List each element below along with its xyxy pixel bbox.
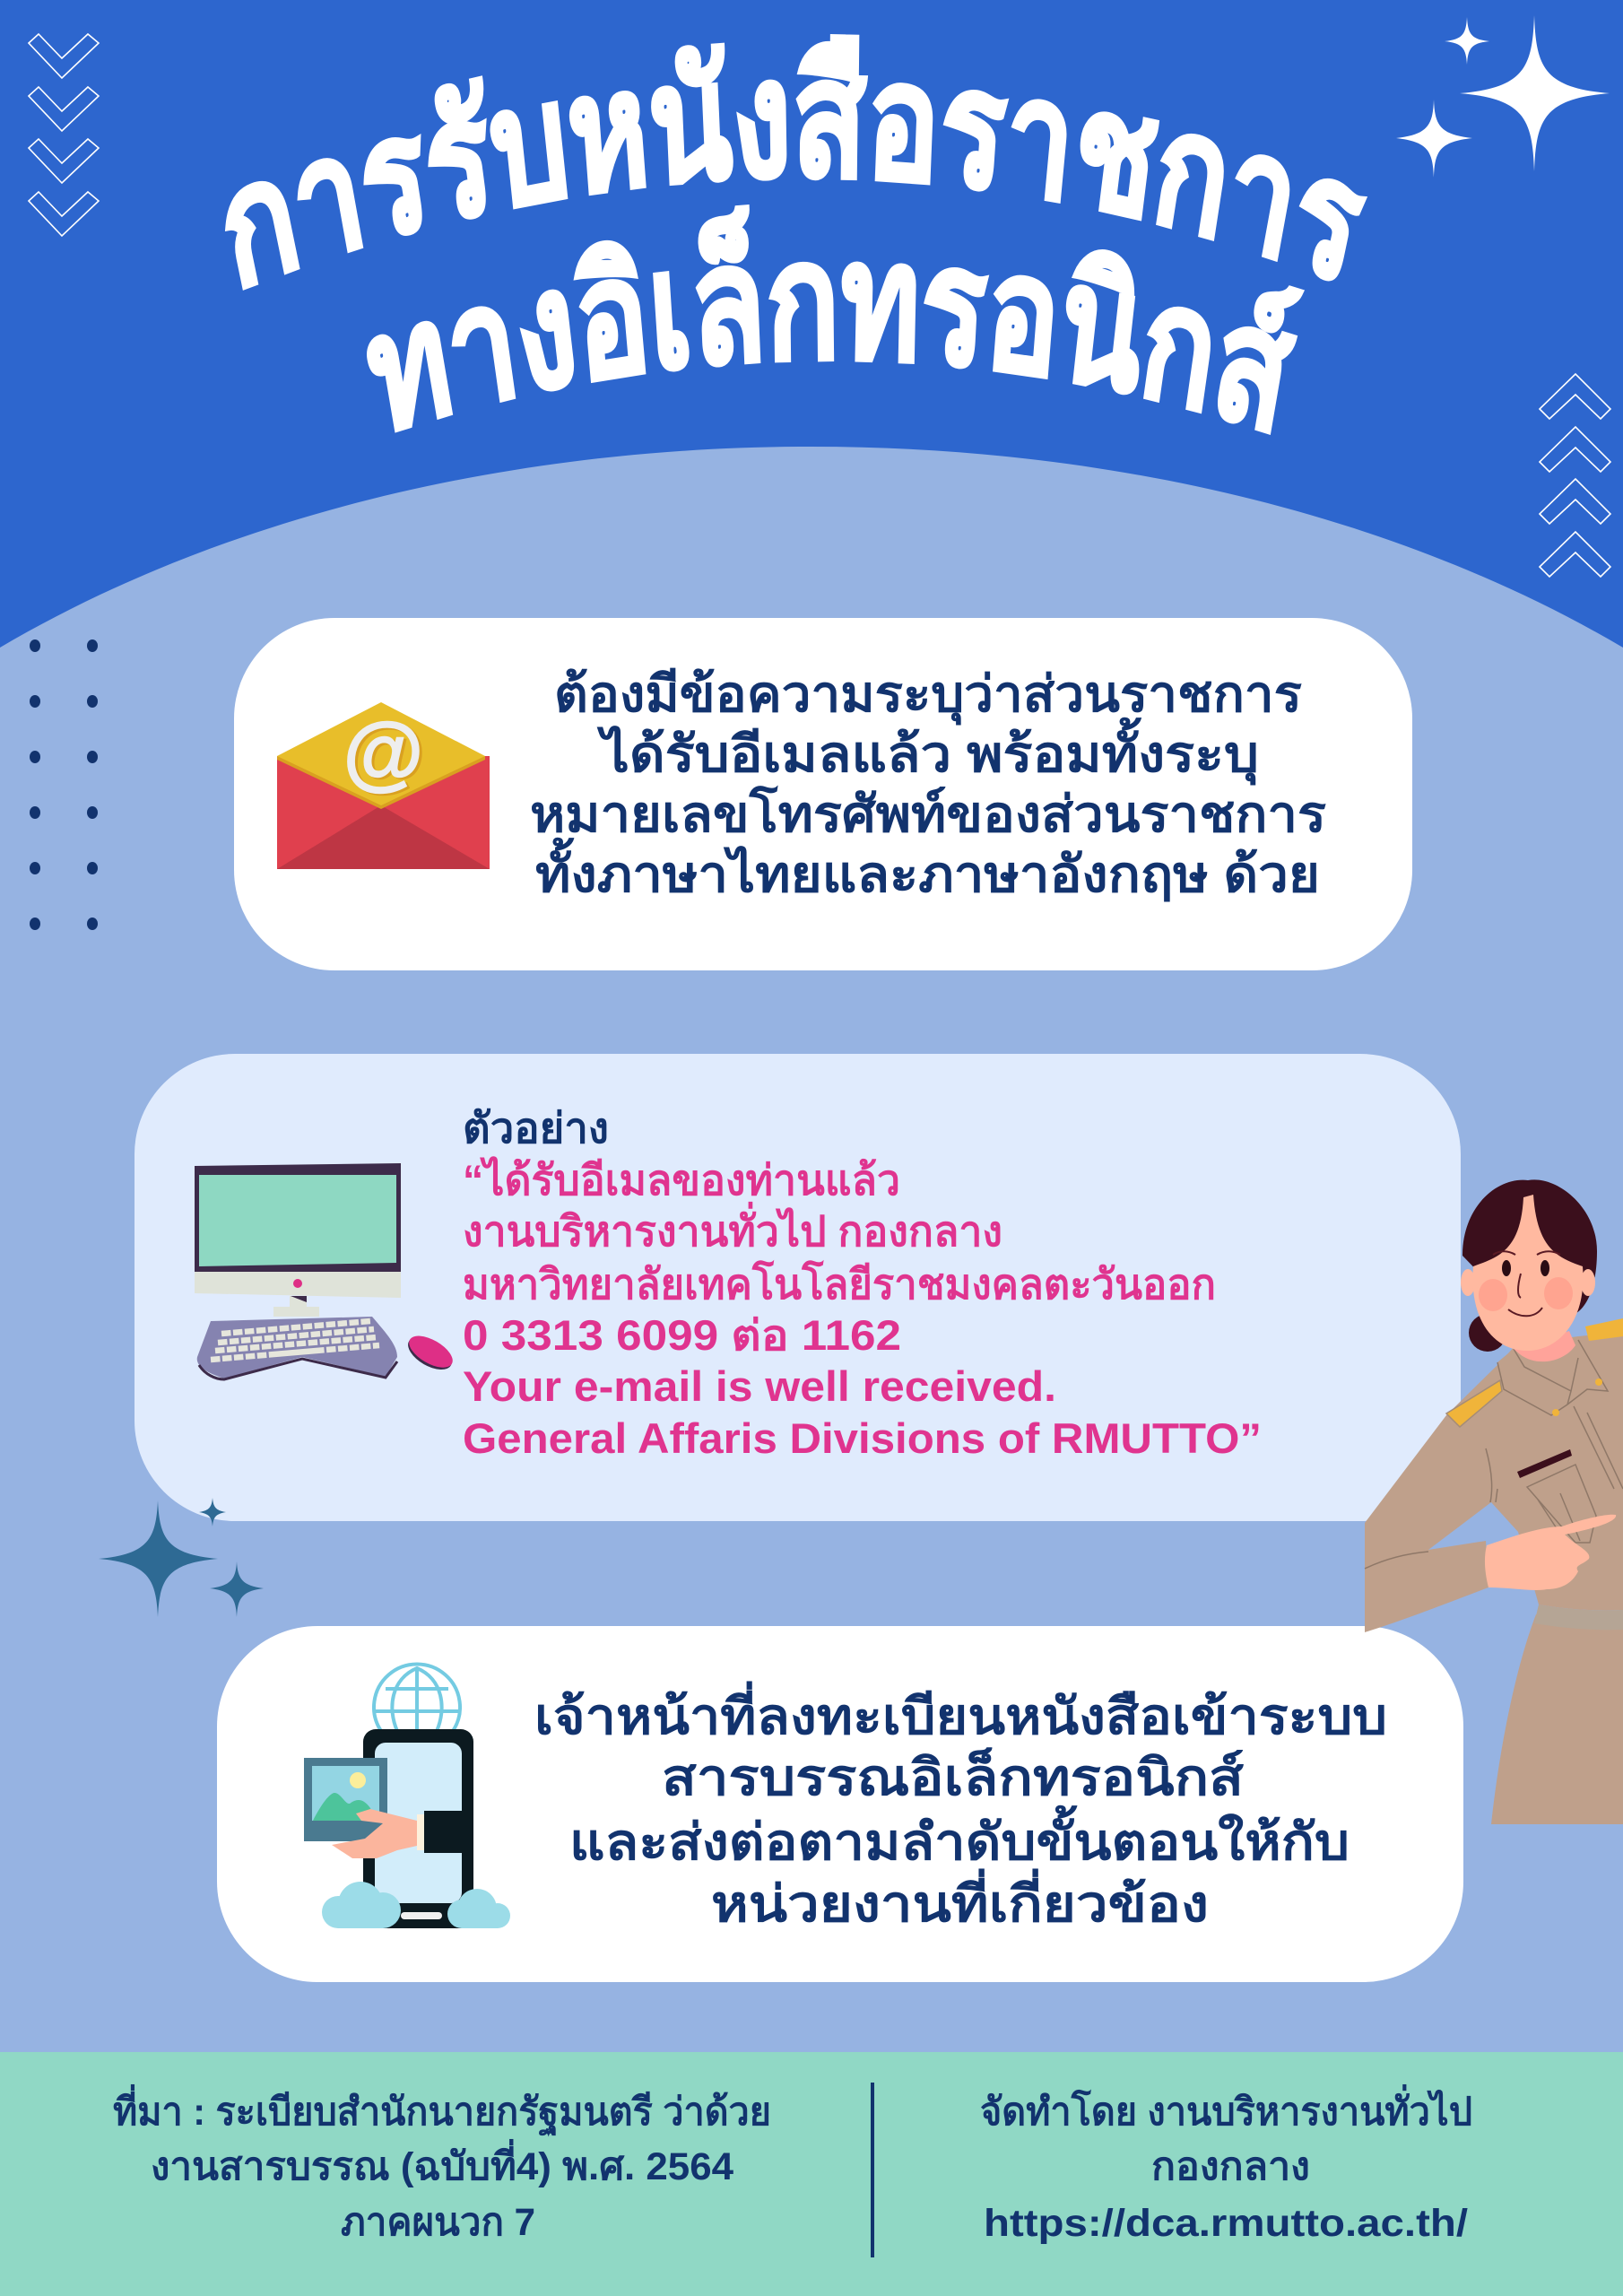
panel: example message xyxy=(135,1054,1461,1521)
hair xyxy=(1462,1179,1597,1313)
panel: email notice xyxy=(234,618,1412,970)
face xyxy=(1472,1195,1584,1351)
collar xyxy=(1497,1340,1608,1415)
hand pointing xyxy=(1485,1515,1616,1590)
belt xyxy=(1534,1605,1623,1630)
text: credits: จัดทำโดย งานบริหารงานทั่วไป xyxy=(980,2084,1472,2134)
icon: phone with globe, picture and clouds xyxy=(304,1664,510,1928)
text: source: ที่มา : ระเบียบสำนักนายกรัฐมนตรี ว่าด้วย xyxy=(113,2084,771,2136)
text: registration step: เจ้าหน้าที่ลงทะเบียนหนังสือเข้าระบบ xyxy=(534,1681,1387,1744)
ears xyxy=(1461,1269,1475,1296)
epaulette right xyxy=(1585,1318,1623,1341)
icon: envelope: @ xyxy=(344,709,425,801)
arm crease lines xyxy=(1365,1448,1497,1569)
text: example message: ตัวอย่าง xyxy=(463,1104,609,1152)
text: email notice: หมายเลขโทรศัพท์ของส่วนราชการ xyxy=(530,785,1326,842)
cheeks xyxy=(1479,1279,1507,1311)
header: blue background with arch xyxy=(0,0,1623,648)
skirt xyxy=(1491,1614,1623,1824)
text: registration step: สารบรรณอิเล็กทรอนิกส์ xyxy=(662,1746,1245,1805)
icon: envelope xyxy=(277,702,490,869)
neck xyxy=(1514,1331,1575,1361)
text: example message: มหาวิทยาลัยเทคโนโลยีราชมงคลตะวันออก xyxy=(463,1259,1216,1308)
icon: chevrons down xyxy=(29,34,99,236)
title: การรับหนังสือราชการ xyxy=(224,34,1368,291)
text: email notice: ทั้งภาษาไทยและภาษาอังกฤษ ด้วย xyxy=(535,838,1320,902)
text: example message: Your e-mail is well received. xyxy=(463,1362,1056,1410)
bun xyxy=(1469,1314,1506,1352)
divider xyxy=(871,2083,874,2257)
title: ทางอิเล็กทรอนิกส์ xyxy=(367,204,1305,435)
brows, nose, mouth xyxy=(1493,1251,1560,1316)
text: credits: กองกลาง xyxy=(1151,2145,1310,2188)
decorative dots xyxy=(30,639,98,930)
torso and arm xyxy=(1365,1332,1623,1632)
pocket and shirt lines xyxy=(1527,1406,1623,1543)
text: source xyxy=(113,2084,771,2244)
icon: envelope: @ xyxy=(342,708,422,799)
text: registration step: หน่วยงานที่เกี่ยวข้อง xyxy=(711,1868,1209,1932)
name bar xyxy=(1517,1449,1572,1478)
text: credits xyxy=(980,2084,1472,2245)
text: registration step xyxy=(534,1681,1387,1932)
text: example message: งานบริหารงานทั่วไป กองกลาง xyxy=(463,1201,1002,1255)
illustration: officer in uniform xyxy=(1365,1179,1623,1824)
text: source: ภาคผนวก 7 xyxy=(341,2201,535,2244)
icon: white sparkles xyxy=(1396,15,1610,178)
text: email notice: ต้องมีข้อความระบุว่าส่วนราชการ xyxy=(554,665,1302,726)
icon: chevrons up xyxy=(1540,374,1610,577)
epaulette left xyxy=(1446,1380,1502,1427)
text: credits: https://dca.rmutto.ac.th/ xyxy=(984,2202,1468,2245)
footer band xyxy=(0,2052,1623,2296)
text: example message: “ได้รับอีเมลของท่านแล้ว xyxy=(463,1155,900,1204)
panel: registration step xyxy=(217,1626,1463,1982)
text: example message xyxy=(463,1104,1262,1462)
text: example message: General Affaris Divisions of RMUTTO” xyxy=(463,1414,1262,1462)
eyes xyxy=(1502,1260,1511,1276)
title xyxy=(224,34,1368,435)
text: source: งานสารบรรณ (ฉบับที่4) พ.ศ. 2564 xyxy=(151,2139,733,2188)
text: email notice xyxy=(530,665,1326,902)
icon: desktop computer xyxy=(195,1163,457,1379)
text: email notice: ได้รับอีเมลแล้ว พร้อมทั้งระบุ xyxy=(597,718,1259,786)
text: registration step: และส่งต่อตามลำดับขั้นตอนให้กับ xyxy=(569,1805,1350,1870)
icon: dark sparkles xyxy=(99,1498,264,1617)
text: example message: 0 3313 6099 ต่อ 1162 xyxy=(463,1311,901,1359)
